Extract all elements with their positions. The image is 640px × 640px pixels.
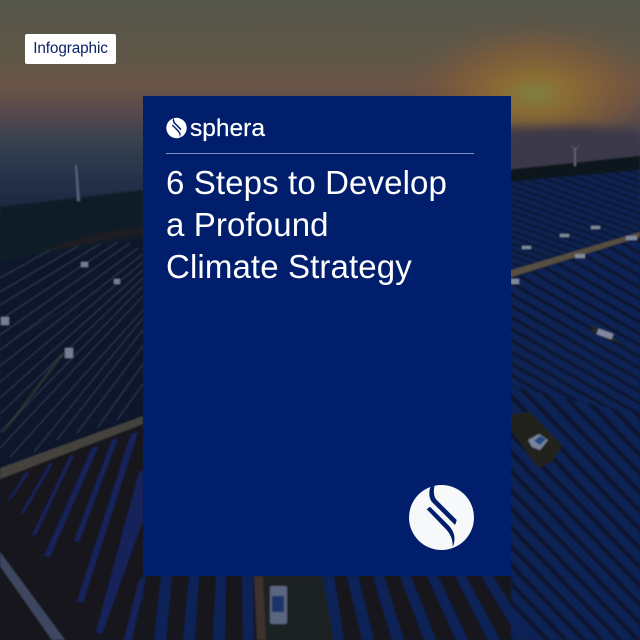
right dirt road bbox=[505, 232, 640, 279]
wind turbine left bbox=[75, 165, 80, 201]
small buildings left bbox=[1, 262, 120, 358]
title: 6 Steps to Develop bbox=[166, 164, 447, 201]
title: Climate Strategy bbox=[166, 248, 412, 285]
small white buildings right bbox=[511, 226, 637, 340]
bottom solar strip bbox=[140, 570, 532, 640]
logo: sphera wordmark: sphera bbox=[190, 115, 265, 142]
ground patch around vehicle bbox=[263, 576, 334, 640]
bottom-left road bbox=[0, 552, 65, 640]
substation with brown yard bbox=[511, 412, 562, 468]
left dirt road bbox=[0, 416, 143, 479]
wind turbine right bbox=[570, 143, 582, 166]
badge: Infographic: Infographic bbox=[33, 40, 108, 57]
title: a Profound bbox=[166, 206, 329, 243]
lower-left ground and panels bbox=[0, 416, 146, 640]
title bbox=[166, 164, 447, 285]
panel: cover card bbox=[143, 96, 511, 576]
dirt track bbox=[254, 576, 266, 640]
logo: sphera circular mark bbox=[409, 485, 474, 550]
sky bbox=[0, 0, 640, 215]
left solar field bbox=[0, 238, 143, 472]
badge: Infographic bbox=[25, 34, 116, 64]
distant landscape left bbox=[0, 165, 143, 262]
white vehicle bbox=[270, 586, 287, 624]
right solar field bbox=[505, 143, 640, 640]
